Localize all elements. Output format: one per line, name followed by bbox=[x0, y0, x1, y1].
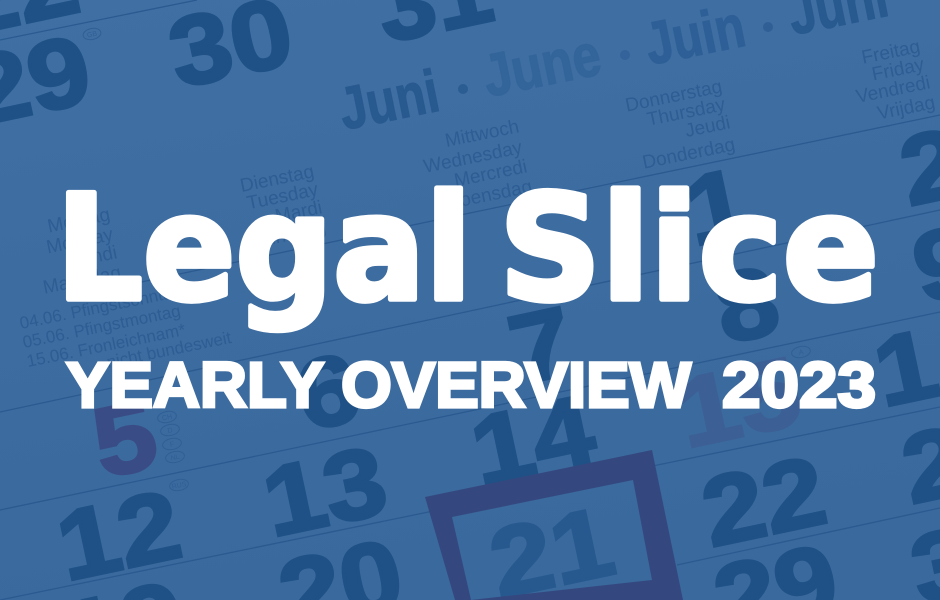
weekday labels: Thursday bbox=[645, 94, 727, 131]
calendar date numbers: 12 bbox=[48, 470, 190, 600]
weekday labels: Friday bbox=[870, 54, 926, 85]
country code badges: GB bbox=[87, 30, 98, 39]
calendar date numbers: 13 bbox=[254, 426, 396, 558]
country code badges: NL bbox=[170, 454, 180, 462]
weekday labels: Donnerstag bbox=[624, 76, 724, 116]
holiday notes bbox=[18, 282, 233, 372]
month heading: Juni June Juin Juni bbox=[333, 0, 894, 143]
highlighted date box around 21 bbox=[425, 450, 683, 600]
weekday labels: Freitag bbox=[860, 36, 922, 69]
weekday labels: Mittwoch bbox=[443, 116, 521, 152]
subtitle: Yearly Overview 2023: 2023 bbox=[722, 349, 876, 421]
weekday labels: Vendredi bbox=[854, 72, 932, 108]
weekday labels: Woensdag bbox=[441, 176, 534, 215]
weekday labels: Mercredi bbox=[452, 156, 529, 192]
country code badges: A bbox=[798, 349, 805, 357]
weekday labels: Wednesday bbox=[422, 137, 524, 178]
weekday labels bbox=[41, 36, 937, 299]
weekday labels: Mardi bbox=[273, 197, 324, 227]
month heading: Juni June Juin Juni: June bbox=[477, 21, 606, 110]
weekday labels: Dienstag bbox=[238, 161, 316, 197]
calendar date numbers: 5 bbox=[84, 380, 166, 499]
calendar date numbers: 8 bbox=[706, 246, 788, 365]
title: Legal Slice: Legal bbox=[56, 164, 472, 334]
country code badges: CH bbox=[162, 414, 173, 422]
calendar date numbers: 15 bbox=[668, 337, 810, 469]
title: Legal Slice: Slice bbox=[499, 164, 879, 334]
weekday labels: Lundi bbox=[69, 242, 119, 272]
calendar date numbers: 14 bbox=[462, 375, 604, 507]
holiday notes: 05.06. Pfingstmontag bbox=[21, 301, 182, 352]
month heading: Juni June Juin Juni: Juni bbox=[333, 57, 445, 143]
weekday labels: Vrijdag bbox=[876, 92, 937, 125]
weekday labels: Monday bbox=[45, 224, 115, 258]
weekday labels: Dinsdag bbox=[255, 217, 328, 252]
holiday notes: nicht bundesweit bbox=[105, 328, 233, 372]
country code badges: RUS bbox=[171, 481, 187, 491]
calendar date numbers: 7 bbox=[500, 287, 582, 406]
subtitle: Yearly Overview 2023: YEARLY OVERVIEW bbox=[66, 349, 692, 421]
holiday notes: 04.06. Pfingstsonntag bbox=[18, 282, 183, 333]
holiday notes: 15.06. Fronleichnam* bbox=[25, 320, 188, 371]
country code badges: F bbox=[169, 441, 175, 449]
country code badges: D bbox=[167, 427, 173, 435]
weekday labels: Montag bbox=[46, 204, 112, 238]
weekday labels: Donderdag bbox=[641, 134, 737, 174]
calendar date numbers: 22 bbox=[693, 436, 835, 568]
title: Legal Slice bbox=[56, 164, 879, 334]
calendar date numbers: 6 bbox=[287, 333, 369, 452]
weekday labels: Tuesday bbox=[245, 179, 320, 214]
weekday labels: Maandag bbox=[41, 262, 123, 299]
calendar date numbers: 1 bbox=[676, 148, 758, 267]
weekday labels: Jeudi bbox=[683, 112, 732, 142]
country code badges bbox=[82, 27, 811, 492]
